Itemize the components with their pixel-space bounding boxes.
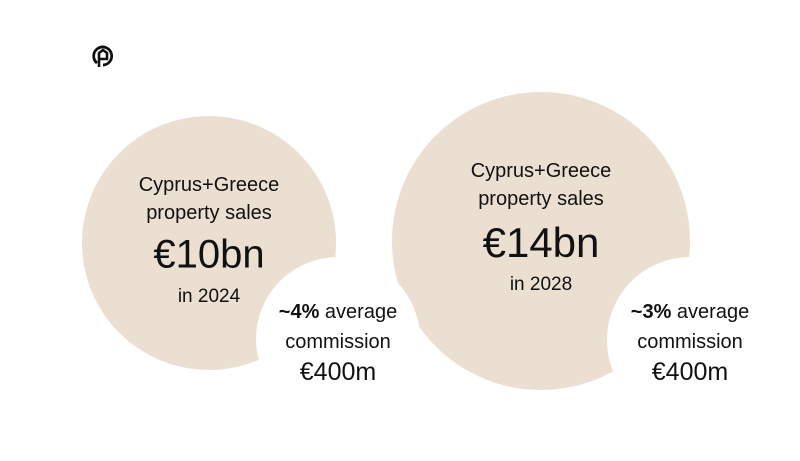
text: 2028 heading: property sales bbox=[478, 188, 604, 210]
icon: logo bbox=[92, 46, 114, 67]
text: in 2024: in 2024 bbox=[178, 286, 240, 307]
callout: 3% commission: €400m bbox=[652, 358, 728, 386]
text: 2024 heading: property sales bbox=[146, 202, 272, 224]
callout: 3% commission bbox=[631, 301, 749, 386]
callout: 4% commission: €400m bbox=[300, 358, 376, 386]
white notch 2 bbox=[607, 257, 773, 423]
callout: 4% commission: commission bbox=[285, 331, 391, 353]
callout: 4% commission: ~4% average bbox=[279, 301, 397, 323]
panel: 2024 circle bbox=[82, 116, 336, 370]
callout: 3% commission: ~3% average bbox=[631, 301, 749, 323]
text: 10bn: €10bn bbox=[153, 232, 265, 276]
text: 2028 heading bbox=[471, 160, 611, 210]
text: in 2028: in 2028 bbox=[510, 274, 572, 295]
text: 14bn: €14bn bbox=[483, 219, 599, 266]
callout: 4% commission bbox=[279, 301, 397, 386]
text: 2024 heading bbox=[139, 174, 279, 224]
text: 2028 heading: Cyprus+Greece bbox=[471, 160, 611, 182]
callout: 3% commission: commission bbox=[637, 331, 743, 353]
text: 2024 heading: Cyprus+Greece bbox=[139, 174, 279, 196]
white notch 1 bbox=[256, 257, 420, 421]
panel: 2028 circle bbox=[392, 92, 690, 390]
